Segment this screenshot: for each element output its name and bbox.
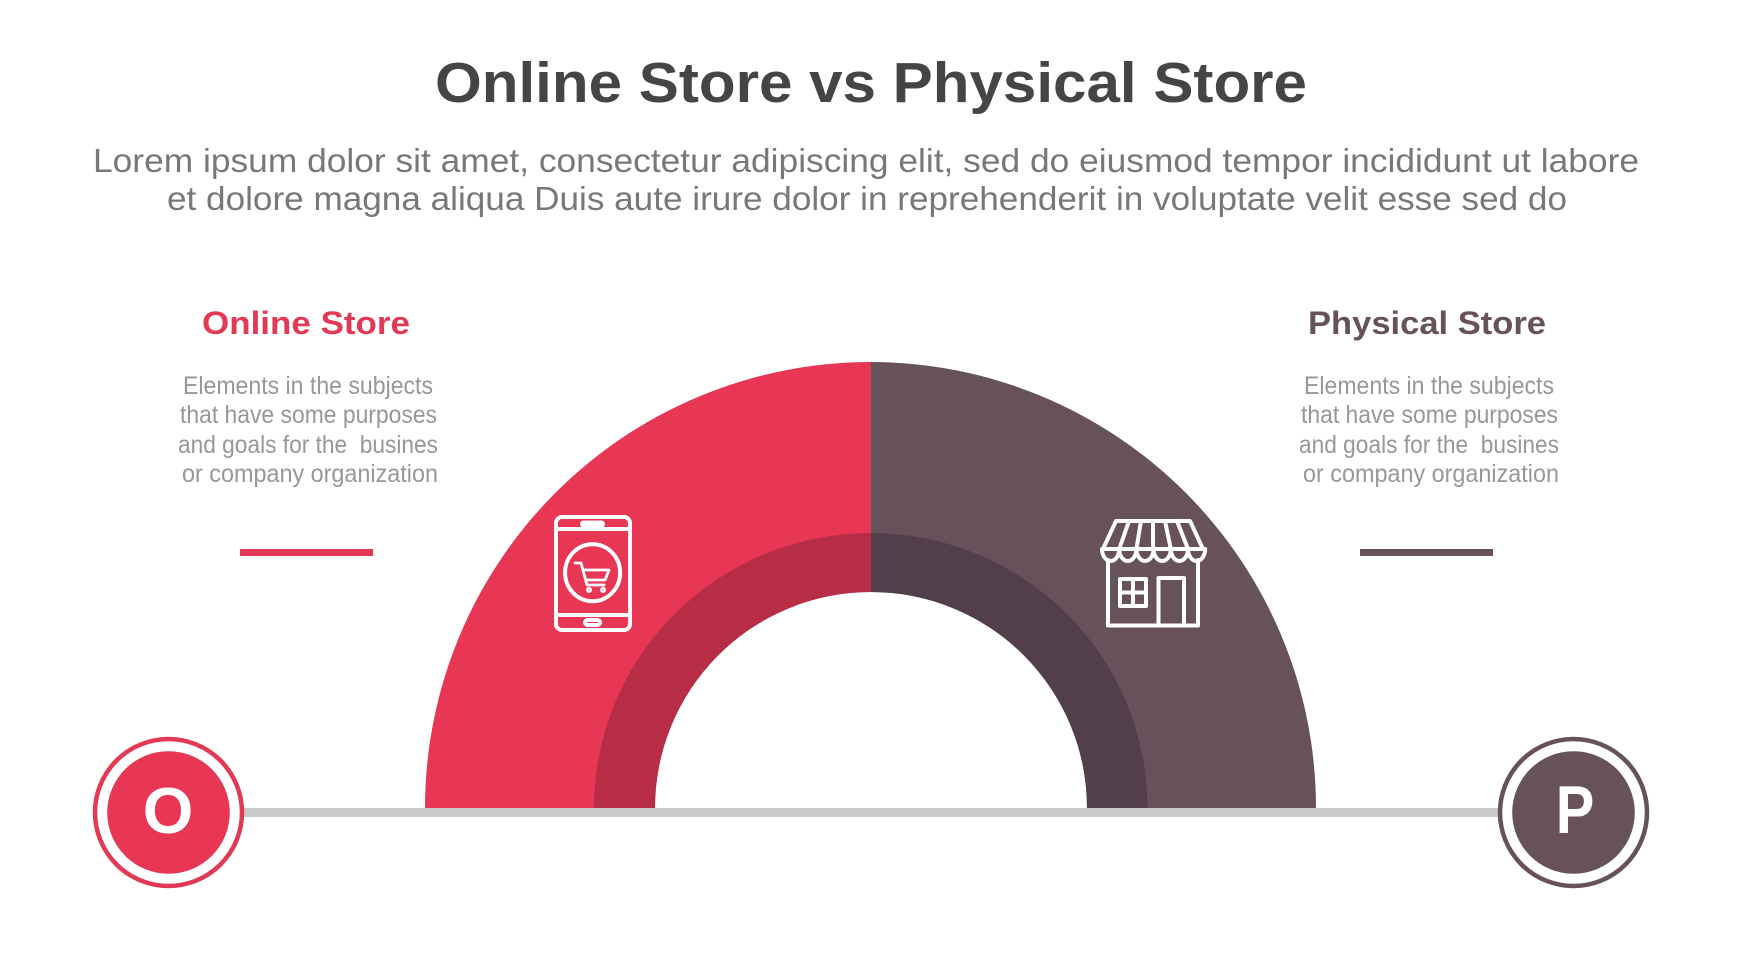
- half-donut chart: [425, 362, 1316, 808]
- badge: P: [1500, 739, 1647, 886]
- heading: physical store: Physical Store: [1308, 305, 1546, 341]
- text block: physical store body: that have some purposes: [1301, 401, 1558, 429]
- text block: online store body: and goals for the busines: [178, 431, 438, 459]
- icon: storefront with awning: [1102, 521, 1205, 626]
- arch segment: online store: [425, 362, 871, 808]
- arch segment: physical store: [871, 362, 1316, 808]
- inner band: physical store: [871, 533, 1148, 808]
- text block: physical store body: or company organization: [1303, 460, 1559, 488]
- subtitle text block: Lorem ipsum dolor sit amet, consectetur adipiscing elit, sed do eiusmod tempor incididunt ut labore: [93, 142, 1639, 179]
- badge: O: O: [143, 774, 193, 847]
- panel: physical store description: [1299, 305, 1559, 556]
- subtitle text block: [93, 142, 1639, 217]
- title: Online Store vs Physical Store: [435, 51, 1307, 115]
- accent rule: physical store: [1360, 549, 1493, 556]
- icon: smartphone with shopping cart: [556, 517, 630, 630]
- inner band: online store: [594, 533, 871, 808]
- heading: online store: Online Store: [202, 305, 410, 341]
- text block: physical store body: [1299, 372, 1559, 488]
- badge: O: [95, 739, 242, 886]
- text block: online store body: or company organization: [182, 460, 438, 488]
- text block: physical store body: and goals for the busines: [1299, 431, 1559, 459]
- text block: online store body: Elements in the subjects: [183, 372, 433, 400]
- panel: online store description: [178, 305, 438, 556]
- accent rule: online store: [240, 549, 373, 556]
- text block: online store body: [178, 372, 438, 488]
- baseline connector: [240, 808, 1502, 817]
- text block: online store body: that have some purposes: [180, 401, 437, 429]
- badge: P: P: [1556, 773, 1594, 848]
- text block: physical store body: Elements in the subjects: [1304, 372, 1554, 400]
- subtitle text block: et dolore magna aliqua Duis aute irure dolor in reprehenderit in voluptate velit esse sed do: [167, 180, 1567, 217]
